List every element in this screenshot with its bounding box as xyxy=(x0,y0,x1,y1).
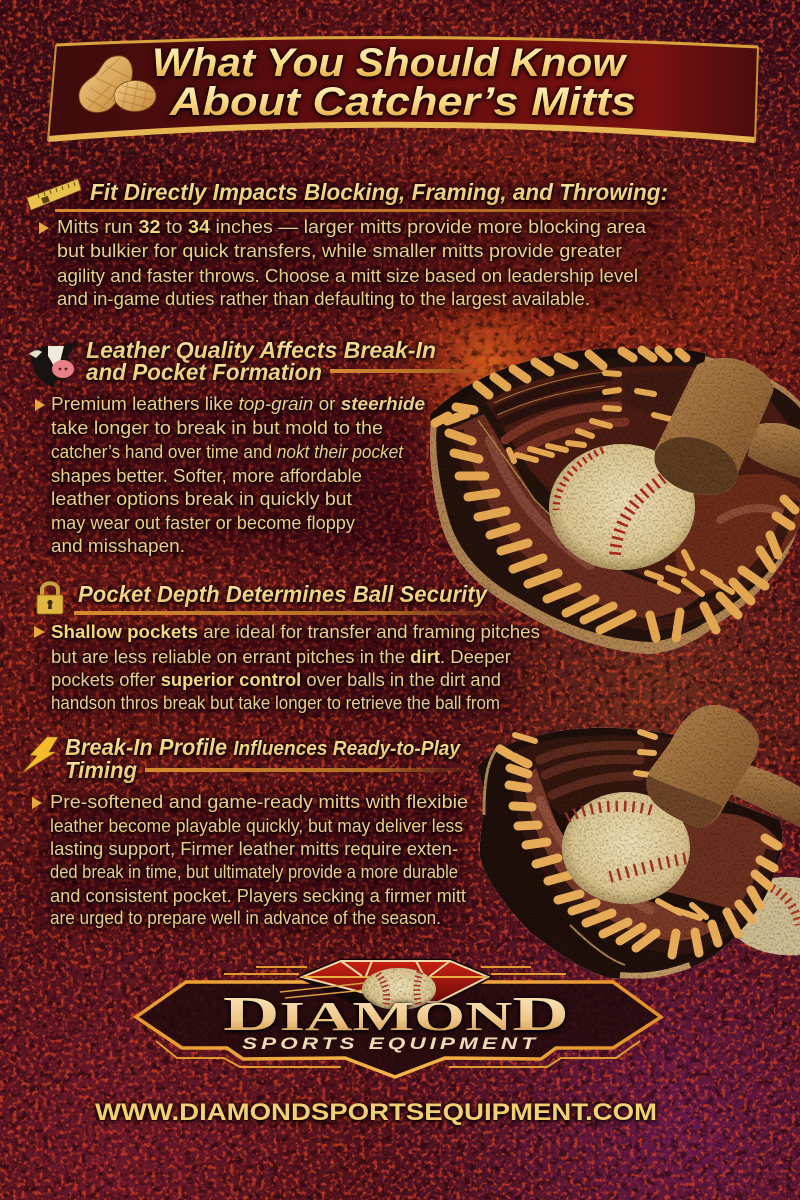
logo: Diamond Sports Equipment xyxy=(136,961,661,1077)
body text: but are less reliable on errant pitches in the dirt. Deeper xyxy=(51,646,511,667)
glove body xyxy=(430,349,800,654)
title text: About Catcher’s Mitts xyxy=(169,80,636,124)
logo wordmark: D IAMON D xyxy=(223,986,569,1041)
baseball, upper xyxy=(549,444,695,570)
section: break-in xyxy=(22,734,475,928)
heading xyxy=(86,337,436,385)
bullet xyxy=(32,797,42,809)
baseball, lower xyxy=(562,792,690,904)
glove and mallet illustration, upper xyxy=(430,349,800,654)
website url: WWW.DIAMONDSPORTSEQUIPMENT.COM xyxy=(95,1099,657,1126)
icon: padlock xyxy=(37,583,63,614)
heading: Pocket Depth Determines Ball Security xyxy=(78,581,488,607)
title text: What You Should Know xyxy=(152,41,628,85)
body text: and misshapen. xyxy=(51,535,185,556)
heading rule xyxy=(55,209,710,212)
heading: and Pocket Formation xyxy=(86,359,322,385)
second baseball behind glove xyxy=(728,877,800,955)
body text xyxy=(51,621,540,713)
heading: Leather Quality Affects Break-In xyxy=(86,337,436,363)
body text: catcher’s hand over time and nokt their pocket xyxy=(51,441,404,462)
glove laces xyxy=(435,350,795,638)
heading rule xyxy=(330,369,485,373)
logo subtitle: SPORTS EQUIPMENT xyxy=(242,1034,539,1053)
body text: Pre-softened and game-ready mitts with flexibie xyxy=(50,791,468,812)
heading xyxy=(65,734,461,783)
body text: ded break in time, but ultimately provide a more durable xyxy=(50,861,458,882)
logo baseball xyxy=(362,968,436,1010)
body text: Shallow pockets are ideal for transfer and framing pitches xyxy=(51,621,540,642)
body text xyxy=(50,791,468,928)
section: leather xyxy=(29,337,485,556)
bullet xyxy=(35,399,45,411)
bullet xyxy=(34,626,45,638)
heading: Timing xyxy=(65,757,137,783)
body text: lasting support, Firmer leather mitts require exten- xyxy=(50,838,458,859)
body text xyxy=(51,393,425,556)
body text: and in-game duties rather than defaulting to the largest available. xyxy=(57,288,590,309)
icon: ruler xyxy=(27,179,81,210)
body text: are urged to prepare well in advance of the season. xyxy=(50,907,441,928)
logo diamond gem xyxy=(280,961,488,1004)
body text: pockets offer superior control over balls in the dirt and xyxy=(51,669,501,690)
bullet xyxy=(39,222,49,234)
body text: handson thros break but take longer to retrieve the ball from xyxy=(51,692,500,713)
glove and mallet illustration, lower xyxy=(477,728,800,978)
body text: Mitts run 32 to 34 inches — larger mitts provide more blocking area xyxy=(57,216,647,237)
glove laces xyxy=(500,732,778,955)
body text: may wear out faster or become floppy xyxy=(51,512,356,533)
heading rule xyxy=(74,611,519,615)
body text: and consistent pocket. Players secking a firmer mitt xyxy=(50,885,466,906)
heading: Break-In Profile Influences Ready-to-Play xyxy=(65,734,461,760)
mallet, lower xyxy=(646,705,800,827)
body text: take longer to break in but mold to the xyxy=(51,417,383,438)
section: fit xyxy=(27,179,710,309)
glove body xyxy=(477,728,782,978)
body text: shapes better. Softer, more affordable xyxy=(51,465,362,486)
title text xyxy=(152,41,636,124)
mallet, upper xyxy=(647,358,800,505)
title banner xyxy=(48,37,758,143)
logo badge xyxy=(136,982,661,1077)
body text: but bulkier for quick transfers, while smaller mitts provide greater xyxy=(57,240,622,261)
heading rule xyxy=(145,768,475,772)
icon: cow xyxy=(29,340,77,388)
body text xyxy=(57,216,647,309)
body text: leather become playable quickly, but may deliver less xyxy=(50,815,463,836)
section: pocket depth xyxy=(34,581,540,713)
body text: leather options break in quickly but xyxy=(51,488,352,509)
icon: lightning bolt xyxy=(22,737,58,773)
heading: Fit Directly Impacts Blocking, Framing, and Throwing: xyxy=(90,179,668,205)
logo accent lines xyxy=(156,967,640,1067)
icon: peanuts xyxy=(79,56,156,112)
text backing shadows xyxy=(40,180,680,925)
body text: agility and faster throws. Choose a mitt size based on leadership level xyxy=(57,265,638,286)
body text: Premium leathers like top-grain or steerhide xyxy=(51,393,425,414)
